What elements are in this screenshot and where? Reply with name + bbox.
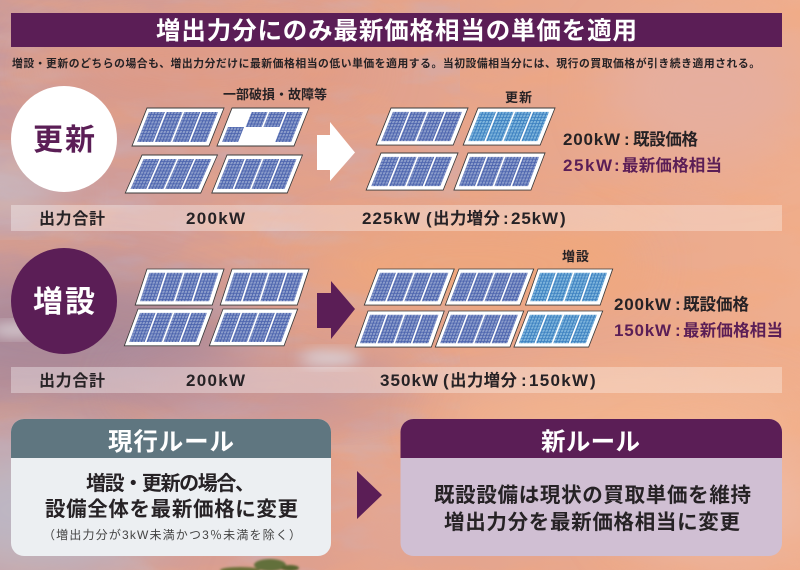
output total row: expansion <box>11 367 782 393</box>
price text: renewal: : <box>624 130 630 149</box>
tree at bottom edge <box>220 559 299 570</box>
solar panels after renewal <box>366 108 555 190</box>
panel: current rule <box>11 419 331 556</box>
price text: expansion: 200kW <box>614 295 672 314</box>
title bar <box>11 13 782 47</box>
panel: current rule: 設備全体を最新価格に変更 <box>45 498 298 521</box>
solar panels after expansion <box>355 269 613 347</box>
output total row: renewal: 出力増分 <box>433 208 500 228</box>
panel: new rule: 増出力分を最新価格相当に変更 <box>444 511 740 534</box>
panel: new rule: 既設設備は現状の買取単価を維持 <box>434 484 751 507</box>
label: damaged panels: 一部破損・故障等 <box>223 87 327 102</box>
solar panels before expansion <box>124 269 309 346</box>
output total row: expansion: 350kW <box>380 371 439 390</box>
output total row: renewal: ) <box>560 209 566 228</box>
arrow: white <box>317 122 355 181</box>
output total row: renewal: ( <box>426 209 432 228</box>
subtitle text: 増設・更新のどちらの場合も、増出力分だけに最新価格相当の低い単価を適用する。当初設備相当分には、現行の買取価格が引き続き適用される。 <box>12 56 760 70</box>
output total row: expansion: 出力合計 <box>39 372 105 390</box>
output total row: renewal: : <box>503 209 509 228</box>
arrow: to new rule <box>357 471 382 519</box>
label: 更新: 更新 <box>505 90 532 105</box>
output total row: renewal: 25kW <box>511 209 559 228</box>
output total row: expansion: 出力増分 <box>450 370 518 390</box>
price text: expansion: : <box>675 295 681 314</box>
price text: renewal: : <box>614 156 620 175</box>
price text: renewal <box>563 130 722 175</box>
price text: expansion: 150kW <box>614 321 672 340</box>
output total row: renewal <box>11 205 782 231</box>
price text: renewal: 25kW <box>563 156 613 175</box>
output total row: expansion: ( <box>443 371 449 390</box>
panel: current rule: 増設・更新の場合、 <box>86 472 255 495</box>
solar panels before renewal <box>125 108 309 193</box>
price text: expansion <box>614 295 783 340</box>
panel: current rule: 現行ルール <box>108 428 234 456</box>
panel: new rule <box>400 419 782 556</box>
badge: 更新 <box>11 86 117 192</box>
output total row: expansion: 200kW <box>186 371 246 390</box>
output total row: expansion: ) <box>590 371 596 390</box>
badge: 増設 <box>11 248 117 354</box>
price text: expansion: 既設価格 <box>683 295 750 314</box>
badge: 増設: 増設 <box>33 286 95 319</box>
output total row: renewal: 225kW <box>362 209 421 228</box>
label: 増設: 増設 <box>562 249 589 264</box>
title bar: 増出力分にのみ最新価格相当の単価を適用 <box>156 17 637 45</box>
price text: renewal: 最新価格相当 <box>622 156 722 175</box>
badge: 更新: 更新 <box>33 124 95 157</box>
panel: current rule: （増出力分が3kW未満かつ3％未満を除く） <box>43 527 301 542</box>
price text: renewal: 既設価格 <box>633 130 698 149</box>
output total row: expansion: 150kW <box>529 371 589 390</box>
panel: new rule: 新ルール <box>541 428 640 456</box>
output total row: expansion: : <box>521 371 527 390</box>
output total row: renewal: 出力合計 <box>39 210 105 228</box>
output total row: renewal: 200kW <box>186 209 246 228</box>
price text: renewal: 200kW <box>563 130 621 149</box>
arrow: purple <box>317 281 355 339</box>
price text: expansion: : <box>675 321 681 340</box>
price text: expansion: 最新価格相当 <box>683 321 783 340</box>
